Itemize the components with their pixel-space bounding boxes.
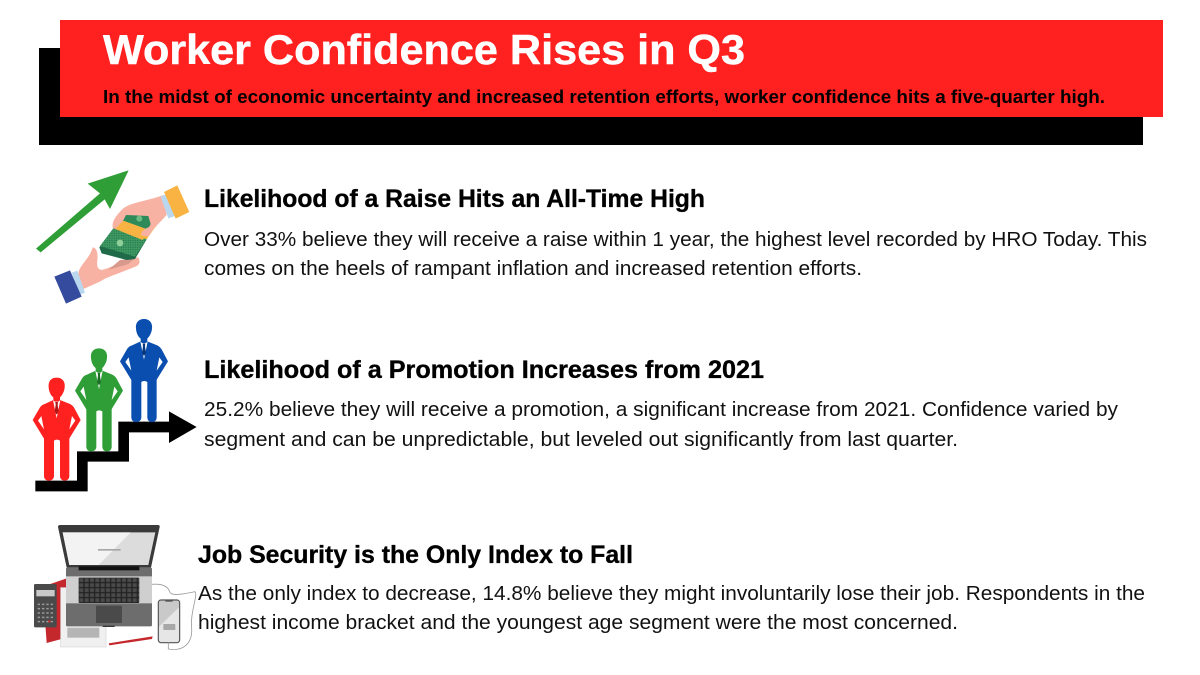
header banner bbox=[60, 20, 1163, 117]
body: raise: Over 33% believe they will receive a raise within 1 year, the highest level recorded by HRO Today. This bbox=[204, 229, 1147, 251]
blue figure bbox=[120, 319, 168, 422]
lower hand bbox=[78, 247, 140, 289]
icon: raise, arrow and hands exchanging money bbox=[36, 170, 189, 304]
icon: desk with laptop, calculator, phone and papers bbox=[34, 525, 196, 649]
laptop base bbox=[66, 568, 152, 626]
title: Worker Confidence Rises in Q3 bbox=[103, 26, 745, 73]
body: promotion: 25.2% believe they will receive a promotion, a significant increase from 2021. Confidence varied by bbox=[204, 399, 1118, 421]
body: promotion: segment and can be unpredictable, but leveled out significantly from last quarter. bbox=[204, 429, 958, 451]
green figure bbox=[75, 348, 123, 451]
body: raise bbox=[204, 229, 1147, 280]
icon: promotion, three figures on stairs with arrow bbox=[33, 319, 197, 491]
subtitle: In the midst of economic uncertainty and increased retention efforts, worker confidence hits a five-quarter high. bbox=[103, 87, 1105, 107]
pen bbox=[109, 636, 153, 645]
laptop screen bbox=[58, 525, 160, 568]
calculator bbox=[34, 584, 57, 627]
stairs arrow bbox=[35, 411, 197, 491]
papers bbox=[61, 588, 106, 647]
body: job security: highest income bracket and the youngest age segment were the most concerned. bbox=[198, 612, 958, 634]
red figure bbox=[33, 378, 81, 481]
heading: promotion: Likelihood of a Promotion Increases from 2021 bbox=[204, 356, 764, 384]
heading: raise: Likelihood of a Raise Hits an All-Time High bbox=[204, 185, 705, 213]
header shadow block bbox=[39, 48, 1143, 145]
body: promotion bbox=[204, 399, 1118, 451]
phone bbox=[158, 600, 180, 643]
body: job security: As the only index to decrease, 14.8% believe they might involuntarily lose their job. Respondents in the bbox=[198, 583, 1145, 605]
red folder bbox=[43, 578, 67, 643]
body: job security bbox=[198, 583, 1145, 634]
cable bbox=[152, 584, 196, 649]
upper hand bbox=[113, 195, 167, 240]
money bbox=[120, 215, 151, 238]
body: raise: comes on the heels of rampant inflation and increased retention efforts. bbox=[204, 258, 862, 280]
heading: job security: Job Security is the Only Index to Fall bbox=[198, 541, 633, 569]
